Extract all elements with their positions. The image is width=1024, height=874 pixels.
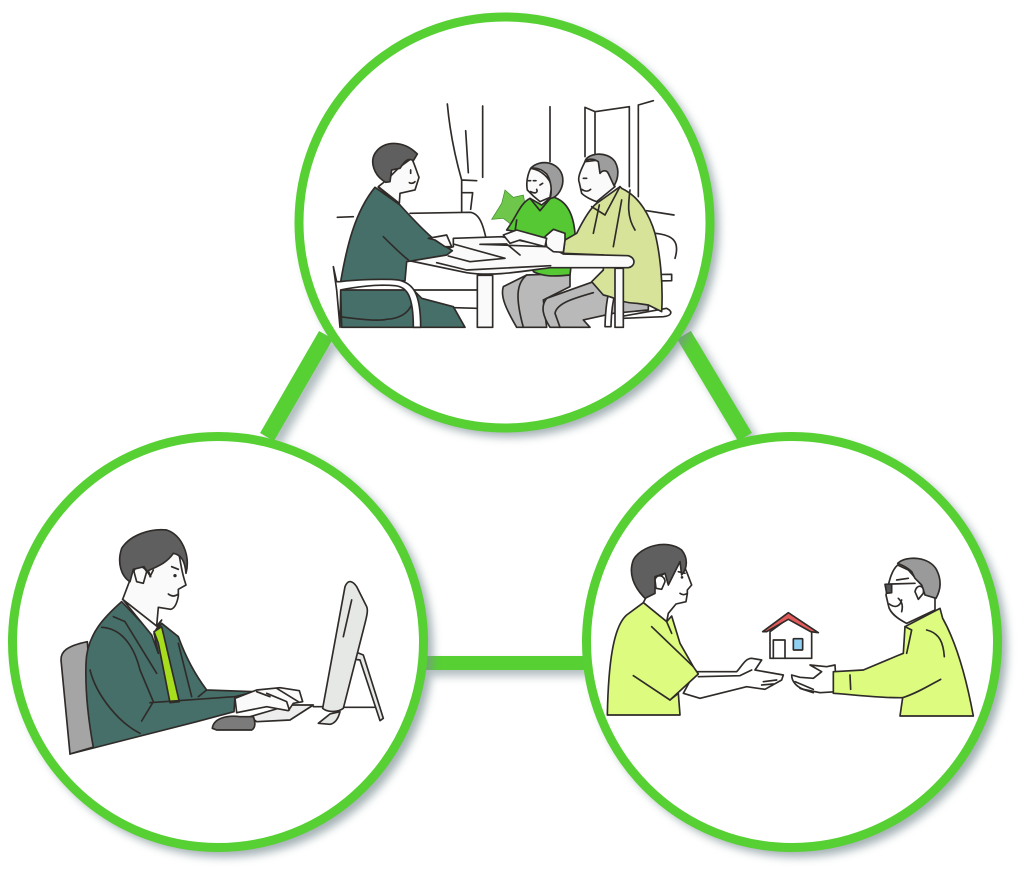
chair right [605,274,672,327]
shirt [123,599,162,653]
jacket lines [90,617,234,733]
right man sleeve and shirt [833,608,973,716]
agent face [378,158,419,203]
chair [61,642,95,754]
house window [793,639,803,650]
monitor stand [355,652,383,721]
left man neck and face [643,562,692,622]
woman trousers [502,273,570,327]
man head [579,160,615,202]
tie [154,627,179,703]
agent hair [373,143,417,182]
connector: right link [684,335,745,437]
agent hand [428,235,452,247]
room background lines [337,101,677,308]
agent jacket [341,187,452,282]
table legs [477,275,493,327]
right man hand [792,665,837,693]
jacket [70,602,255,754]
right man ear [915,586,924,599]
right man face [886,565,935,623]
keyboard [250,705,313,722]
monitor [323,582,367,711]
agent lower body [341,290,465,327]
connector shadows [273,341,751,669]
illustration: handing over a house [607,544,973,716]
right man glasses [885,583,915,593]
house roof [763,613,818,633]
face and neck [123,552,186,626]
illustration: consultation at a table [333,101,677,327]
circle: right [586,436,998,848]
illustration: agent at a computer [61,530,383,754]
woman hair [531,163,563,199]
connector: bottom link [424,656,590,670]
connector: left link [267,335,326,437]
man trousers [543,282,648,327]
monitor foot [318,712,340,724]
house walls [770,618,812,658]
agent chair arm [333,267,421,327]
man collar [592,187,635,247]
face details [150,567,178,596]
left man ear [655,576,665,589]
man hair [585,154,618,186]
mouse [212,716,255,730]
man shirt [563,187,662,312]
woman top [507,197,575,276]
circle: left [12,436,424,848]
plant [492,190,525,225]
left man far arm [683,658,783,698]
hair [120,530,187,582]
woman head [527,168,552,202]
table [406,237,634,274]
joined hands [545,229,565,252]
left man shirt [607,603,698,715]
ear [134,567,147,583]
circle: top [299,17,710,428]
house door [773,640,785,658]
hand [235,688,303,713]
right man hair [898,558,940,598]
left man hair [631,544,686,598]
